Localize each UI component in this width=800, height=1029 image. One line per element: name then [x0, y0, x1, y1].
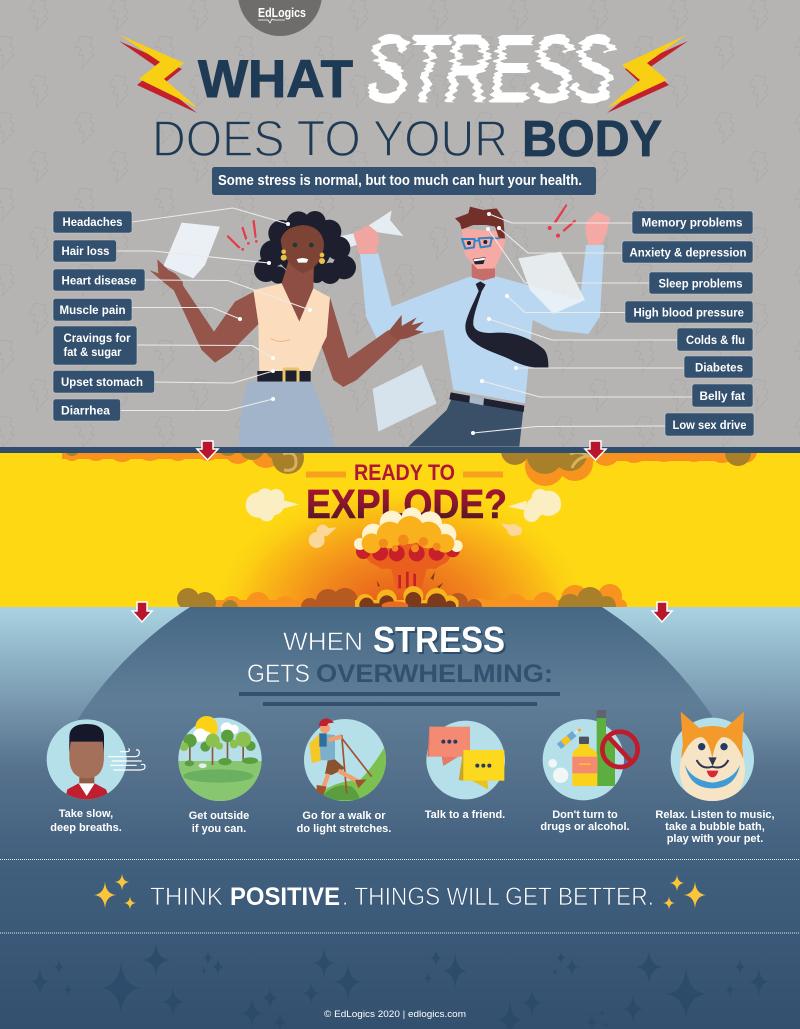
heading: when stress gets overwhelming: WHEN	[283, 628, 363, 656]
label: Diarrhea	[53, 399, 120, 421]
mushroom cloud explosion	[354, 507, 463, 613]
icon: right sparkles	[663, 874, 706, 910]
left hand	[149, 259, 183, 290]
dotted divider bottom	[0, 932, 800, 934]
face	[281, 225, 325, 273]
heading: ready to explode: READY TO	[354, 460, 455, 485]
yellow background	[0, 453, 800, 607]
footer star field	[30, 943, 769, 1029]
belt	[257, 369, 311, 383]
stem	[389, 562, 428, 589]
arrow: down left upper	[197, 441, 218, 460]
label: Cravings for fat and sugar: fat & sugar	[64, 345, 122, 359]
label: Upset stomach	[53, 370, 154, 393]
neck	[282, 262, 314, 322]
caption: if you can.	[192, 823, 246, 835]
paper in front of man	[518, 252, 585, 314]
label: Muscle pain	[53, 298, 132, 321]
label: Memory problems: Memory problems	[642, 216, 743, 230]
heading: ready to explode	[306, 460, 507, 527]
positive message	[150, 883, 654, 911]
title	[152, 16, 662, 167]
title: DOES TO YOUR	[152, 110, 508, 167]
head	[455, 207, 505, 269]
label: Belly fat: Belly fat	[700, 389, 745, 403]
caption: play with your pet.	[667, 833, 763, 845]
arrow: down right lower	[652, 602, 672, 622]
label: Low sex drive: Low sex drive	[672, 418, 747, 432]
caption: Go for a walk or	[302, 810, 386, 822]
icon: left sparkles	[94, 874, 136, 910]
label: Diabetes	[684, 356, 753, 378]
label: Belly fat	[692, 384, 753, 407]
yellow body	[362, 516, 454, 553]
caption: Talk to a friend.	[425, 809, 505, 821]
tip: get outside	[178, 716, 262, 835]
leader lines: right labels	[473, 214, 692, 433]
right arm	[322, 297, 400, 387]
subtitle banner	[212, 167, 596, 195]
tip: walk or stretch	[297, 718, 391, 835]
label: Anxiety and depression	[622, 241, 753, 263]
label: Heart disease: Heart disease	[62, 274, 137, 288]
crumpled paper	[338, 211, 403, 248]
heading: when stress gets overwhelming: GETS	[247, 660, 310, 688]
label: Cravings for fat and sugar: Cravings for	[64, 331, 131, 345]
footer credit: © EdLogics 2020 | edlogics.com	[324, 1009, 466, 1020]
tip: slow breaths	[47, 719, 145, 834]
title: BODY	[522, 110, 662, 167]
smoke puffs	[246, 488, 561, 548]
left arm	[173, 285, 259, 363]
shirt	[360, 245, 604, 403]
label: High blood pressure	[625, 301, 753, 323]
label: Upset stomach: Upset stomach	[61, 375, 143, 389]
icon: person breathing	[47, 719, 145, 800]
icon: bottles with prohibition sign	[543, 710, 638, 800]
caption: deep breaths.	[50, 822, 122, 834]
leader lines: left labels	[116, 208, 310, 410]
caption	[655, 809, 775, 845]
caption: drugs or alcohol.	[540, 821, 630, 833]
heading: when stress gets overwhelming: STRESS	[373, 619, 505, 660]
panel: ready to explode	[0, 453, 800, 607]
red band	[356, 543, 460, 561]
caption	[297, 810, 391, 835]
flying paper	[163, 223, 220, 278]
tip: relax with pet	[655, 712, 775, 845]
leader dots: left labels	[238, 222, 312, 401]
caption: Get outside	[189, 810, 249, 822]
dome backdrop	[42, 607, 750, 790]
explosion base	[355, 586, 459, 613]
label: Headaches: Headaches	[62, 215, 123, 229]
EdLogics logo badge: EdLogics	[258, 6, 306, 20]
top panel background with lightning pattern	[0, 0, 800, 447]
label: Colds and flu: Colds & flu	[686, 333, 745, 347]
label: Heart disease	[53, 269, 145, 291]
caption	[50, 808, 122, 834]
illustration: stressed man	[338, 204, 610, 447]
label: Muscle pain: Muscle pain	[60, 303, 126, 317]
heading: ready to explode: EXPLODE?	[306, 481, 507, 527]
label: Sleep problems	[649, 272, 753, 294]
top right clouds	[501, 453, 757, 486]
panel: when stress gets overwhelming	[0, 607, 800, 1029]
caption: Don't turn to	[552, 809, 618, 821]
heading underlines	[239, 692, 560, 706]
leader dots: right labels	[471, 212, 518, 435]
caption: Take slow,	[59, 808, 113, 820]
icon: dog	[671, 712, 754, 807]
red stress marks	[227, 220, 258, 251]
label: Sleep problems: Sleep problems	[658, 276, 743, 290]
label: Colds and flu	[677, 328, 753, 351]
positive message: THINK	[150, 883, 223, 911]
skirt	[239, 382, 335, 447]
left fist	[353, 225, 379, 254]
heading: when stress gets overwhelming: OVERWHELMING:	[316, 660, 553, 688]
dotted divider top	[0, 858, 800, 860]
tie	[465, 281, 548, 368]
EdLogics logo badge	[238, 0, 322, 36]
arrow: down left lower	[132, 602, 152, 622]
title: STRESS	[368, 16, 613, 121]
caption: Relax. Listen to music,	[655, 809, 775, 821]
label: Low sex drive	[665, 413, 754, 436]
icon: left lightning bolt	[119, 35, 198, 113]
top left clouds	[62, 453, 304, 474]
heading: when stress gets overwhelming	[247, 619, 553, 688]
label: Diarrhea: Diarrhea	[61, 404, 110, 418]
labels: right column symptoms	[622, 211, 754, 436]
heading: when stress gets overwhelming: STRESS	[375, 621, 507, 662]
caption: take a bubble bath,	[665, 821, 765, 833]
label: High blood pressure: High blood pressure	[634, 306, 744, 320]
label: Cravings for fat and sugar	[53, 326, 137, 365]
label: Diabetes: Diabetes	[695, 360, 743, 374]
caption	[189, 810, 249, 835]
caption: do light stretches.	[297, 823, 391, 835]
belt	[449, 392, 524, 412]
top band	[0, 447, 800, 453]
lower flying paper	[373, 365, 437, 432]
right hand	[388, 315, 424, 340]
cream crown	[354, 507, 463, 552]
neck	[472, 264, 495, 281]
arrow: down right upper	[585, 441, 606, 460]
label: Hair loss	[53, 240, 116, 262]
lower cap	[367, 543, 450, 574]
positive message: . THINGS WILL GET BETTER.	[342, 883, 654, 911]
right fist	[585, 212, 610, 245]
icon: hiker	[304, 718, 387, 803]
bottom clouds	[177, 584, 627, 607]
icon: park with trees	[178, 716, 262, 803]
label: Memory problems	[632, 211, 753, 234]
icon: right lightning bolt	[607, 35, 688, 113]
tip: talk to a friend	[425, 721, 505, 821]
label: Anxiety and depression: Anxiety & depression	[630, 246, 746, 260]
label: Hair loss: Hair loss	[62, 244, 110, 258]
illustration: stressed woman	[149, 211, 424, 447]
positive message: POSITIVE	[230, 883, 340, 911]
icon: speech bubbles	[426, 721, 505, 799]
title: WHAT	[198, 50, 353, 109]
labels: left column symptoms	[53, 211, 154, 421]
subtitle banner: Some stress is normal, but too much can hurt your health.	[218, 172, 582, 189]
hair	[254, 211, 356, 284]
trousers	[408, 398, 523, 447]
red stress marks	[548, 204, 576, 238]
caption	[540, 809, 630, 833]
blouse	[253, 283, 330, 372]
tip: avoid drugs or alcohol	[540, 710, 638, 833]
label: Headaches	[53, 211, 132, 233]
orange glow	[235, 498, 564, 600]
